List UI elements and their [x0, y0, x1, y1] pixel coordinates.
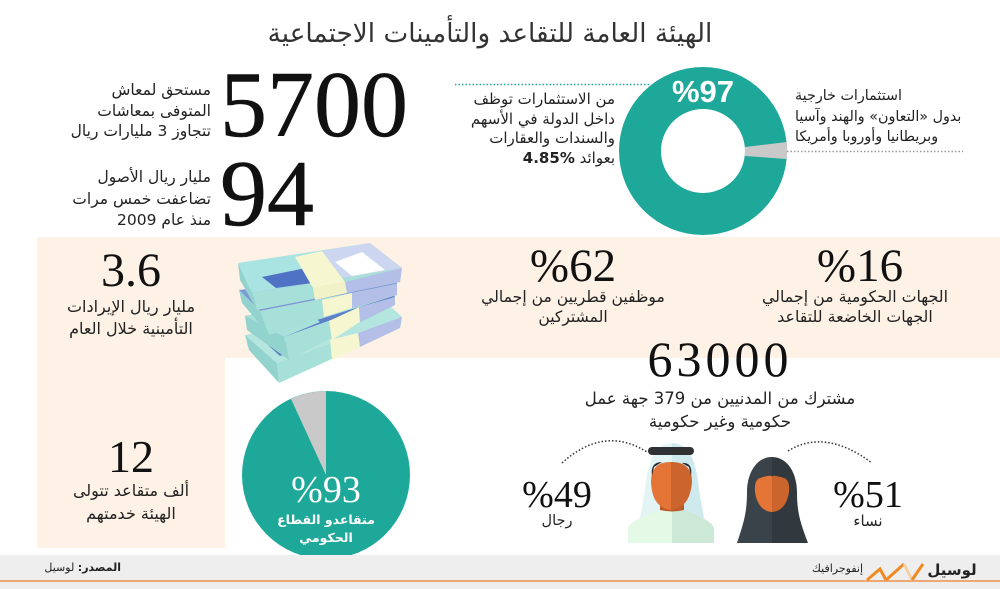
- text: domestic investments: من الاستثمارات توظف: [474, 90, 615, 108]
- text: domestic investments: والسندات والعقارات: [489, 129, 615, 147]
- number 51: %51: [833, 474, 903, 516]
- text: foreign investments: وبريطانيا وأوروبا وأمريكا: [795, 129, 938, 145]
- pie chart: government retirees: [242, 391, 410, 555]
- description 3.6: مليار ريال الإيرادات: [67, 297, 195, 316]
- icon: stacked banknotes: [238, 243, 402, 383]
- description 94: مليار ريال الأصول: [97, 168, 211, 186]
- logo zigzag: [866, 563, 924, 581]
- description 62: المشتركين: [538, 308, 608, 326]
- text: foreign investments: استثمارات خارجية: [795, 88, 902, 104]
- footer: [0, 555, 1000, 589]
- pie label: متقاعدو القطاع: [277, 512, 375, 527]
- text: domestic investments: [471, 90, 615, 166]
- number 49: %49: [522, 474, 592, 516]
- stat: 5700: [71, 53, 408, 157]
- bundle 4: [245, 305, 402, 383]
- dotted arc women: [788, 441, 871, 462]
- icon: woman: [737, 457, 808, 543]
- pie label: [277, 512, 375, 545]
- description 12: [73, 480, 189, 523]
- description 63000: مشترك من المدنيين من 379 جهة عمل: [585, 389, 855, 408]
- stat: 16%: [762, 240, 948, 326]
- label women: نساء: [853, 512, 883, 530]
- stat: 62%: [481, 240, 665, 326]
- donut value: %97: [672, 74, 734, 109]
- pie label: الحكومي: [299, 530, 353, 545]
- description 94: منذ عام 2009: [117, 211, 211, 229]
- title: الهيئة العامة للتقاعد والتأمينات الاجتماعية: [268, 19, 712, 49]
- number 5700: 5700: [220, 53, 408, 157]
- description 12: ألف متقاعد تتولى: [73, 481, 189, 500]
- description 62: [481, 288, 665, 326]
- stat: 94: [72, 142, 314, 246]
- number 3.6: 3.6: [101, 244, 161, 297]
- text: foreign investments: [795, 88, 961, 145]
- number 93: %93: [291, 469, 361, 511]
- donut chart: investments: [619, 67, 788, 235]
- dotted arc men: [562, 440, 647, 464]
- icon: man: [628, 443, 714, 543]
- pie value: [277, 469, 375, 545]
- bundle 3: [245, 290, 395, 360]
- bundle 1: [238, 243, 402, 310]
- number 16: %16: [817, 240, 903, 292]
- description 63000: حكومية وغير حكومية: [649, 412, 791, 431]
- description 5700: [71, 81, 211, 140]
- number 94: 94: [220, 142, 314, 246]
- footer line: [0, 580, 1000, 582]
- text: domestic investments: بعوائد %4.85: [523, 148, 615, 166]
- description 16: الجهات الحكومية من إجمالي: [762, 287, 948, 306]
- text: foreign investments: بدول «التعاون» والهند وآسيا: [795, 108, 961, 124]
- logo wordmark: لوسيل: [927, 561, 977, 579]
- description 12: الهيئة خدمتهم: [86, 504, 176, 523]
- label men: رجال: [542, 513, 572, 529]
- description 5700: مستحق لمعاش: [112, 81, 211, 99]
- description 5700: تتجاوز 3 مليارات ريال: [71, 122, 211, 140]
- number 62: %62: [530, 240, 616, 292]
- infographic label: إنفوجرافيك: [812, 562, 863, 575]
- description 62: موظفين قطريين من إجمالي: [481, 288, 665, 306]
- stat: women: [833, 474, 903, 530]
- description 94: تضاعفت خمس مرات: [72, 190, 211, 208]
- dotted leader right: [787, 150, 963, 152]
- description 5700: المتوفى بمعاشات: [97, 102, 211, 120]
- stat: 12: [73, 431, 189, 523]
- number 12: 12: [108, 431, 154, 482]
- description 3.6: [67, 297, 195, 338]
- dotted leader left: [455, 84, 649, 86]
- description 94: [72, 167, 211, 229]
- stat: 63000: [585, 331, 855, 431]
- description 3.6: التأمينية خلال العام: [69, 319, 193, 338]
- bundle 2: [239, 270, 397, 335]
- number 63000: 63000: [648, 331, 792, 387]
- source: المصدر: لوسيل: [44, 561, 121, 574]
- stat: 3.6: [67, 244, 195, 338]
- stat: men: [522, 474, 592, 529]
- description 16: الجهات الخاضعة للتقاعد: [777, 307, 933, 326]
- text: domestic investments: داخل الدولة في الأسهم: [471, 110, 615, 128]
- description 63000: [585, 389, 855, 431]
- description 16: [762, 287, 948, 326]
